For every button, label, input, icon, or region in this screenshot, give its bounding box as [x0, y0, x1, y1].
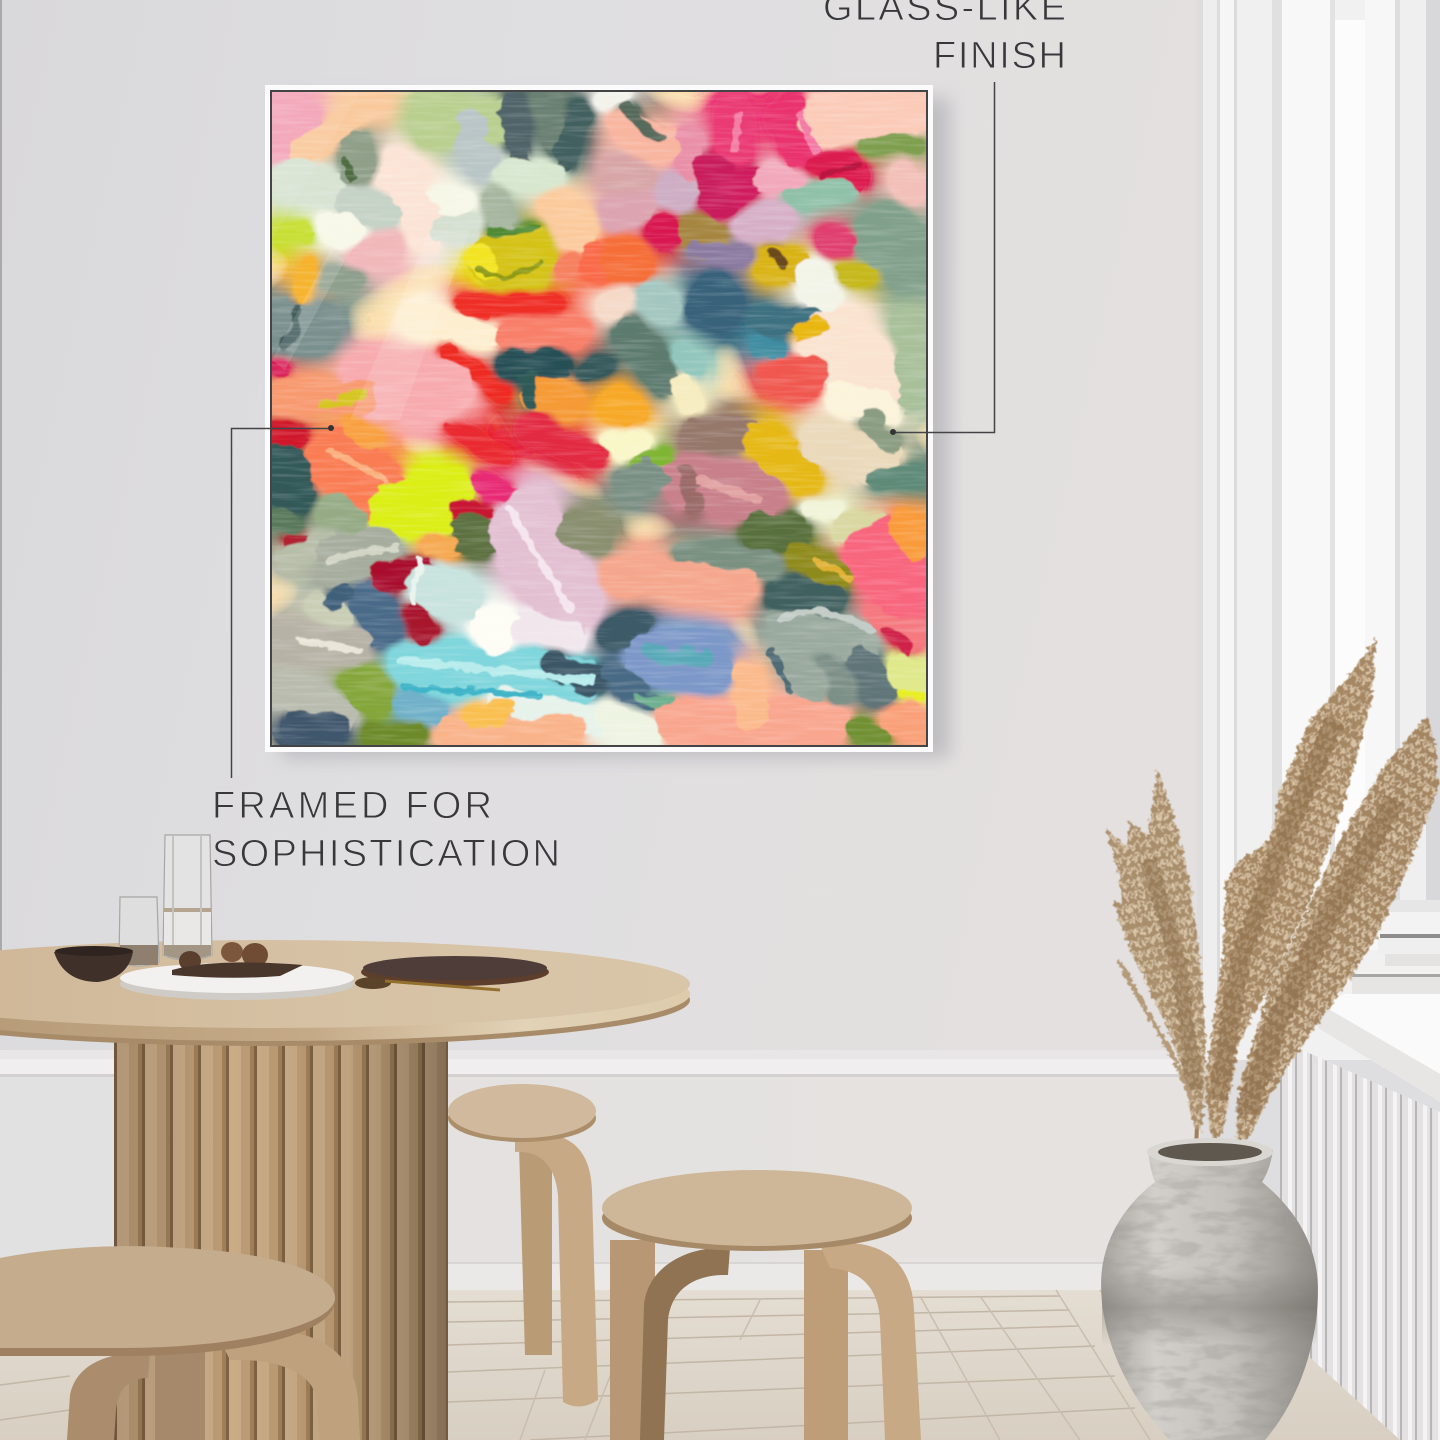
dark wooden plate — [361, 956, 549, 986]
back stool — [448, 1084, 598, 1407]
marble plate — [120, 963, 354, 1000]
left plume — [1106, 768, 1206, 1130]
glass reflections — [272, 215, 464, 420]
round table top — [0, 940, 690, 1046]
callout heading: FINISH — [933, 35, 1066, 77]
leader line — [232, 428, 330, 778]
wall — [0, 0, 1200, 1060]
carafe — [163, 835, 212, 960]
pampas stems — [1196, 1100, 1245, 1155]
spoon — [355, 977, 500, 990]
ceramic vase — [1095, 1138, 1325, 1440]
callout heading: SOPHISTICATION — [212, 833, 560, 875]
front right stool — [602, 1170, 921, 1440]
fluted table pedestal — [114, 1035, 448, 1440]
lower wall panel — [0, 1075, 1200, 1275]
leader dot — [328, 425, 334, 431]
fine brush details — [300, 115, 870, 695]
right plume — [1236, 716, 1438, 1138]
radiator — [1280, 1040, 1440, 1440]
painting white frame — [265, 85, 933, 752]
brush streak texture — [272, 92, 926, 745]
skirting board — [0, 1262, 1200, 1291]
sill edge — [1318, 1004, 1440, 1102]
leader line — [895, 82, 994, 432]
callout: glass-like finish — [823, 0, 1066, 435]
chair rail moulding — [0, 1050, 1200, 1077]
books on window sill — [1352, 912, 1440, 994]
front left stool — [0, 1246, 360, 1440]
callout: framed for sophistication — [212, 425, 560, 875]
nuts on plate — [172, 942, 303, 978]
blended underpainting — [272, 96, 920, 738]
left wall edge — [0, 0, 2, 960]
wooden floor — [0, 1290, 1440, 1440]
leader dot — [890, 429, 896, 435]
drinking glass — [119, 897, 159, 966]
callout heading — [823, 0, 1066, 77]
callout heading — [212, 785, 560, 875]
enlarged soft brush layer — [272, 96, 920, 738]
painting drop shadow — [282, 98, 950, 758]
centre plume — [1204, 638, 1376, 1140]
window frame and reveal — [1197, 0, 1440, 1060]
window sill — [1320, 994, 1440, 1074]
broad brush strokes — [272, 96, 920, 738]
pampas grass — [1106, 638, 1438, 1155]
abstract painting — [272, 92, 926, 745]
callout heading: FRAMED FOR — [212, 785, 492, 827]
dark bowl — [54, 946, 133, 982]
